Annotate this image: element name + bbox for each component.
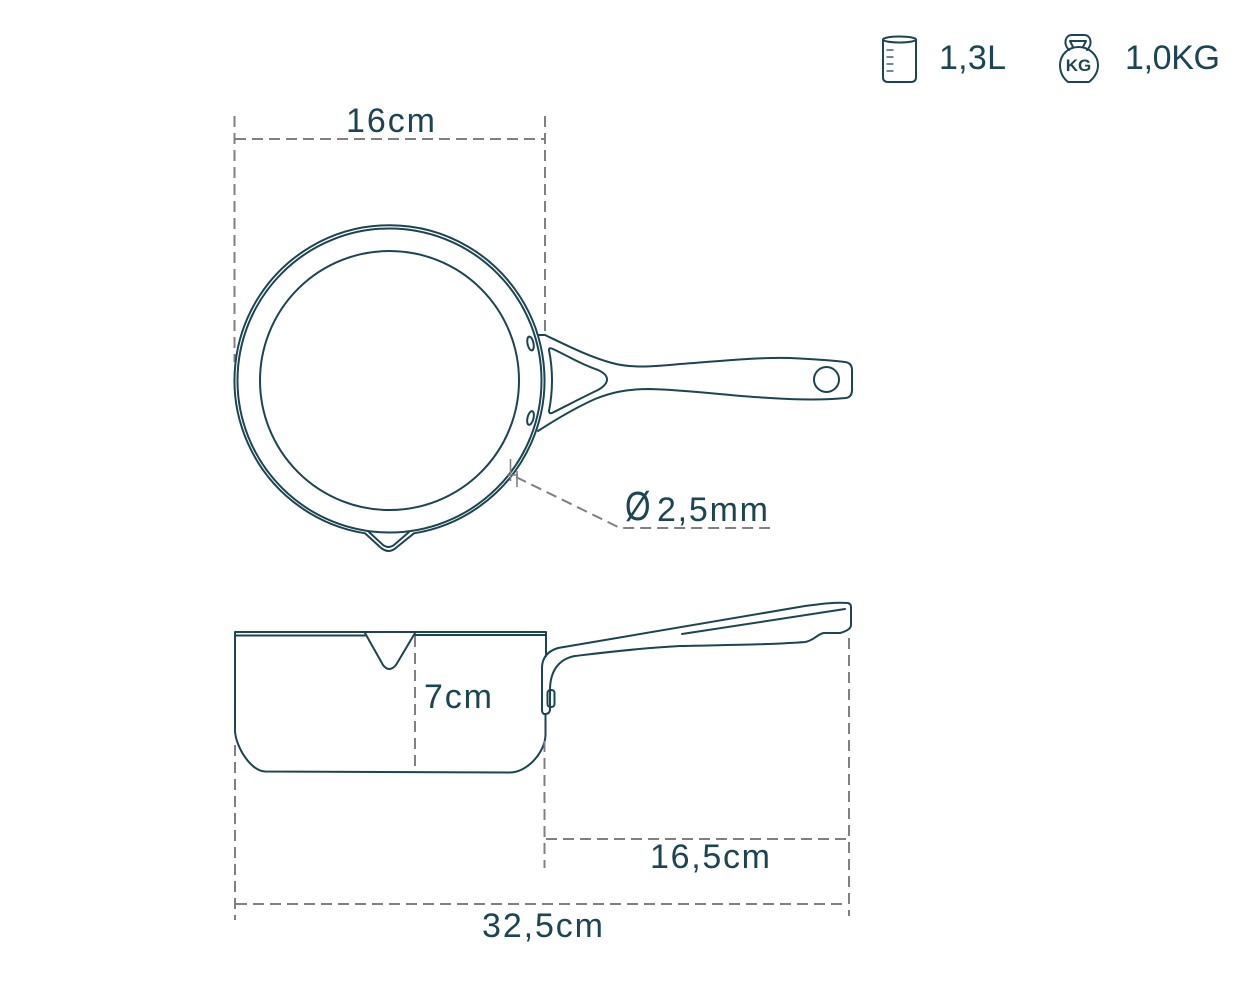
- handle outline: [538, 335, 852, 431]
- icon: kettlebell: KG: [1066, 56, 1091, 75]
- label: wall thickness: 2,5mm: [657, 491, 768, 529]
- side handle: [542, 603, 851, 714]
- dimension: handle length lines: [544, 638, 849, 916]
- capacity value: 1,3L: [939, 39, 1006, 77]
- weight value: 1,0KG: [1125, 39, 1220, 77]
- pot body: [235, 632, 546, 772]
- wall thickness callout line: [516, 477, 770, 528]
- spout notch: [365, 633, 415, 669]
- side view of saucepan: [235, 603, 851, 772]
- dimension: height line: [414, 636, 416, 771]
- label: diameter 16cm: 16cm: [346, 102, 435, 140]
- rim lower line: [235, 634, 546, 636]
- spout inner line: [369, 532, 409, 547]
- label: handle length: 16,5cm: [650, 838, 770, 876]
- rivets: [526, 336, 535, 426]
- dimension: overall length lines: [235, 745, 848, 920]
- icon: measuring beaker: [883, 36, 916, 82]
- dimension: pan diameter lines: [234, 116, 545, 362]
- handle triangular cut-out: [549, 348, 607, 413]
- top view of saucepan: [235, 225, 852, 551]
- label: wall thickness: [625, 482, 768, 529]
- pan outer rim and spout: [235, 225, 545, 551]
- handle rivet: [548, 690, 554, 707]
- pan base circle: [260, 251, 519, 510]
- wall thickness marker: [507, 459, 518, 487]
- icon: kettlebell: [1060, 35, 1098, 82]
- handle highlight line: [682, 609, 845, 634]
- label: height 7cm: 7cm: [424, 678, 492, 716]
- inner rim circle: [238, 228, 542, 532]
- label: overall length: 32,5cm: [482, 907, 603, 945]
- label: wall thickness: Ø: [625, 482, 651, 529]
- handle hanging hole: [814, 367, 839, 392]
